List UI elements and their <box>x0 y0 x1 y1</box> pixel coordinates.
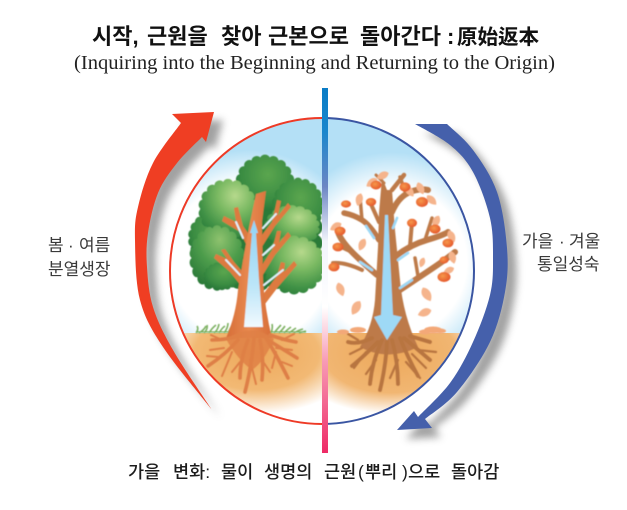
title: 原始返本 <box>457 26 539 49</box>
title: 시작, <box>92 24 139 49</box>
roots <box>207 334 297 392</box>
subtitle: (Inquiring into the Beginning and Returning to the Origin) <box>74 52 555 74</box>
caption: 변화: <box>173 462 210 482</box>
light-blue descending arrow <box>374 215 402 340</box>
circle outline: blue half <box>322 118 474 424</box>
label: spring and summer: 분열생장 <box>48 260 111 279</box>
label: autumn and winter: 통일성숙 <box>537 255 600 274</box>
center divider bar <box>322 88 328 453</box>
caption: ( <box>358 462 364 482</box>
foliage <box>188 155 325 294</box>
tree: autumn persimmon tree <box>328 170 457 390</box>
title: 근본으로 <box>268 24 349 49</box>
caption: ) <box>402 462 408 482</box>
title: : <box>447 24 454 49</box>
grass <box>196 323 306 333</box>
label: spring and summer: · <box>68 236 74 255</box>
label: autumn and winter: 겨울 <box>569 232 600 251</box>
trunk and branches <box>214 191 297 338</box>
label: spring and summer: 여름 <box>79 236 110 255</box>
label: spring and summer: 봄 <box>48 236 64 255</box>
caption: 물이 <box>221 462 253 482</box>
caption: 근원 <box>324 462 356 482</box>
caption: 가을 <box>128 462 160 482</box>
caption: 생명의 <box>264 462 312 482</box>
label: autumn and winter: 가을 <box>522 232 553 251</box>
roots <box>348 334 436 390</box>
tree: green spring and summer tree <box>188 155 325 392</box>
title: 근원을 <box>147 24 208 49</box>
persimmons <box>328 180 454 282</box>
arrow: red rising arrow (spring and summer) <box>135 112 223 418</box>
light-blue rising arrow <box>244 220 263 327</box>
arrow: blue descending arrow (autumn and winter) <box>397 124 517 439</box>
branches <box>333 175 455 290</box>
label: autumn and winter: · <box>559 232 565 251</box>
caption: 뿌리 <box>365 462 397 482</box>
title: 돌아간다 <box>360 24 441 49</box>
caption: 으로 <box>408 462 440 482</box>
panel: circle scene background <box>165 115 480 428</box>
fallen leaves on ground <box>337 326 446 334</box>
circle outline: red half <box>170 118 322 424</box>
caption: 돌아감 <box>451 462 499 482</box>
falling leaves <box>328 170 457 318</box>
title: 찾아 <box>221 24 261 49</box>
